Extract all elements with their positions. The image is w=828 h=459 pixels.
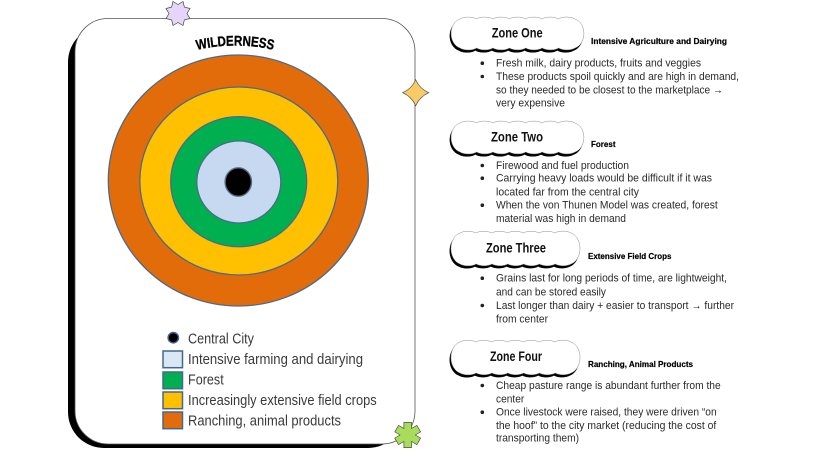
- legend: Intensive farming and dairying: [188, 352, 363, 368]
- panel: zone one: [450, 17, 739, 110]
- zone three bullets: [480, 273, 734, 325]
- zone four bullets: Cheap pasture range is abundant further from the: [496, 380, 721, 392]
- zone one bullets: very expensive: [496, 98, 565, 110]
- icon: gold star: [403, 80, 429, 106]
- legend: Central City: [188, 331, 255, 347]
- zone four bullets: transporting them): [496, 433, 579, 445]
- zone three subtitle: Extensive Field Crops: [588, 251, 672, 261]
- zone four title: Zone Four: [490, 349, 543, 364]
- legend: Ranching, animal products: [188, 413, 341, 429]
- zone three bullets: and can be stored easily: [496, 287, 607, 299]
- zone four bullets: [480, 380, 721, 445]
- zone two bullets: located far from the central city: [496, 186, 640, 198]
- zone three bullets: Last longer than dairy + easier to transport → further: [496, 300, 734, 312]
- legend: [163, 331, 377, 429]
- chart: concentric zones: [108, 55, 368, 306]
- panel: zone three: [450, 231, 734, 325]
- zone two subtitle: Forest: [591, 139, 616, 149]
- zone three bullets: Grains last for long periods of time, are lightweight,: [496, 273, 727, 285]
- zone four bullets: the hoof” to the city market (reducing the cost of: [496, 420, 716, 432]
- zone two bullets: When the von Thunen Model was created, forest: [496, 200, 718, 212]
- zone one bullets: so they needed to be closest to the marketplace →: [496, 84, 723, 96]
- zone two title: Zone Two: [491, 130, 543, 145]
- zone two cloud badge: [450, 121, 584, 156]
- panel: zone four: [450, 340, 721, 445]
- heading: wilderness: WILDERNESS: [194, 36, 274, 50]
- zone one cloud badge: [450, 17, 584, 52]
- zone four cloud badge: [450, 340, 580, 377]
- zone one bullets: [480, 58, 739, 110]
- icon: purple star: [166, 2, 190, 26]
- zone three title: Zone Three: [486, 240, 546, 255]
- zone one bullets: Fresh milk, dairy products, fruits and veggies: [496, 58, 701, 70]
- zone one subtitle: Intensive Agriculture and Dairying: [591, 36, 727, 46]
- panel: zone two: [450, 121, 718, 225]
- zone one bullets: These products spoil quickly and are high in demand,: [496, 71, 739, 83]
- zone two bullets: Firewood and fuel production: [496, 160, 629, 172]
- legend: Increasingly extensive field crops: [188, 393, 377, 409]
- zone two bullets: material was high in demand: [496, 213, 626, 225]
- zone four subtitle: Ranching, Animal Products: [588, 359, 693, 369]
- zone three bullets: from center: [496, 313, 548, 325]
- icon: green asterisk: [396, 422, 419, 448]
- zone three cloud badge: [450, 231, 580, 268]
- panel: model card: [68, 18, 415, 448]
- zone one title: Zone One: [492, 25, 543, 40]
- zone four bullets: center: [496, 393, 525, 405]
- zone four bullets: Once livestock were raised, they were driven “on: [496, 407, 717, 419]
- zone two bullets: [480, 160, 718, 225]
- legend: Forest: [188, 373, 224, 389]
- zone two bullets: Carrying heavy loads would be difficult if it was: [496, 173, 712, 185]
